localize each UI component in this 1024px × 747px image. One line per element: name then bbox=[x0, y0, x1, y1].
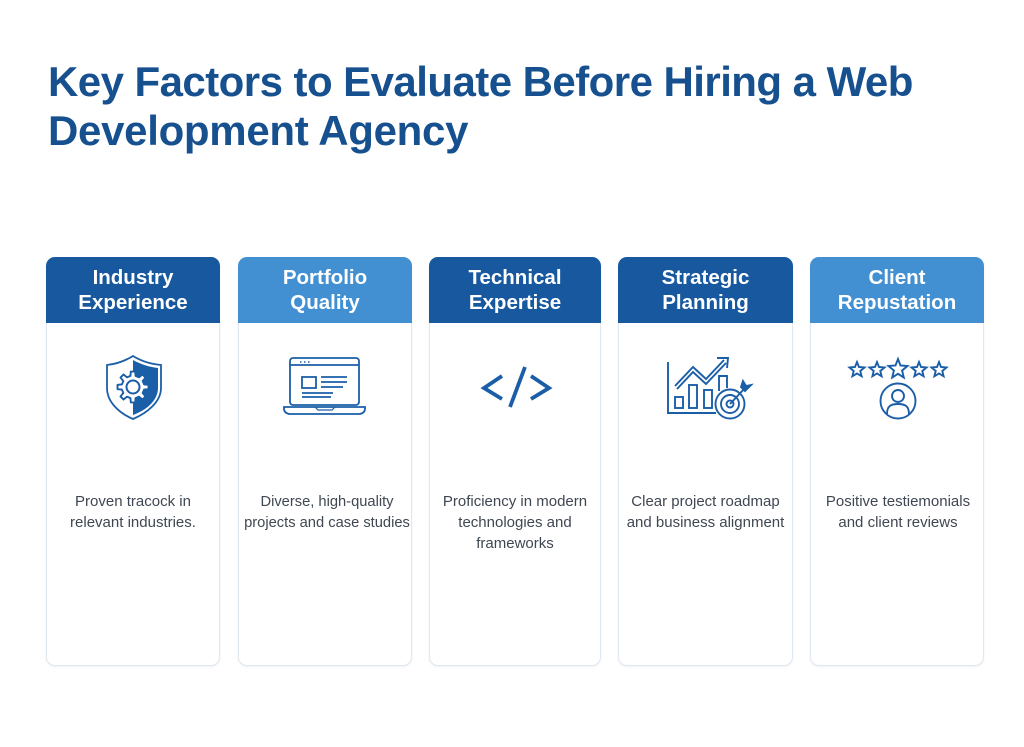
description: Clear project roadmap bbox=[631, 493, 780, 510]
panel: Technical Expertise bbox=[429, 257, 601, 666]
heading: Portfolio Quality bbox=[238, 257, 412, 323]
heading: Portfolio Quality: Portfolio bbox=[283, 266, 367, 289]
description: and client reviews bbox=[838, 514, 958, 531]
panel: Industry Experience bbox=[46, 257, 220, 666]
description: relevant industries. bbox=[70, 514, 196, 531]
description: and business alignment bbox=[627, 514, 784, 531]
description bbox=[627, 493, 784, 531]
panel: Strategic Planning bbox=[618, 257, 793, 666]
heading: Technical Expertise: Expertise bbox=[469, 291, 561, 314]
description: Positive testiemonials bbox=[826, 493, 970, 510]
description: technologies and bbox=[458, 514, 572, 531]
description: Proficiency in modern bbox=[443, 493, 587, 510]
panel: Client Reputation bbox=[810, 257, 984, 666]
heading: Strategic Planning bbox=[618, 257, 793, 323]
heading: Strategic Planning: Planning bbox=[662, 291, 749, 314]
description bbox=[443, 493, 587, 552]
description: projects and case studies bbox=[244, 515, 410, 531]
heading: Industry Experience bbox=[46, 257, 220, 323]
heading: Industry Experience: Experience bbox=[78, 291, 188, 314]
description bbox=[826, 493, 970, 531]
icon: chart with target bbox=[667, 357, 754, 420]
title: Key Factors to Evaluate Before Hiring a Web bbox=[48, 58, 913, 105]
description bbox=[70, 493, 196, 531]
description: Diverse, high-quality bbox=[260, 494, 394, 510]
heading: Portfolio Quality: Quality bbox=[290, 291, 360, 314]
title: Development Agency bbox=[48, 107, 468, 154]
icon: stars and user bbox=[847, 356, 949, 420]
heading: Client Reputation bbox=[810, 257, 984, 323]
heading: Client Reputation: Repustation bbox=[838, 291, 956, 314]
heading: Client Reputation: Client bbox=[869, 266, 925, 289]
icon: laptop with web page bbox=[283, 357, 366, 415]
description: frameworks bbox=[476, 535, 554, 552]
heading: Strategic Planning: Strategic bbox=[662, 266, 749, 289]
icon: shield with gear bbox=[106, 355, 162, 420]
panel: Portfolio Quality bbox=[238, 257, 412, 666]
description: Proven tracock in bbox=[75, 493, 191, 510]
icon: code brackets bbox=[480, 366, 552, 408]
description bbox=[244, 494, 410, 531]
heading: Technical Expertise bbox=[429, 257, 601, 323]
title bbox=[48, 58, 913, 154]
heading: Technical Expertise: Technical bbox=[468, 266, 562, 289]
heading: Industry Experience: Industry bbox=[93, 266, 173, 289]
